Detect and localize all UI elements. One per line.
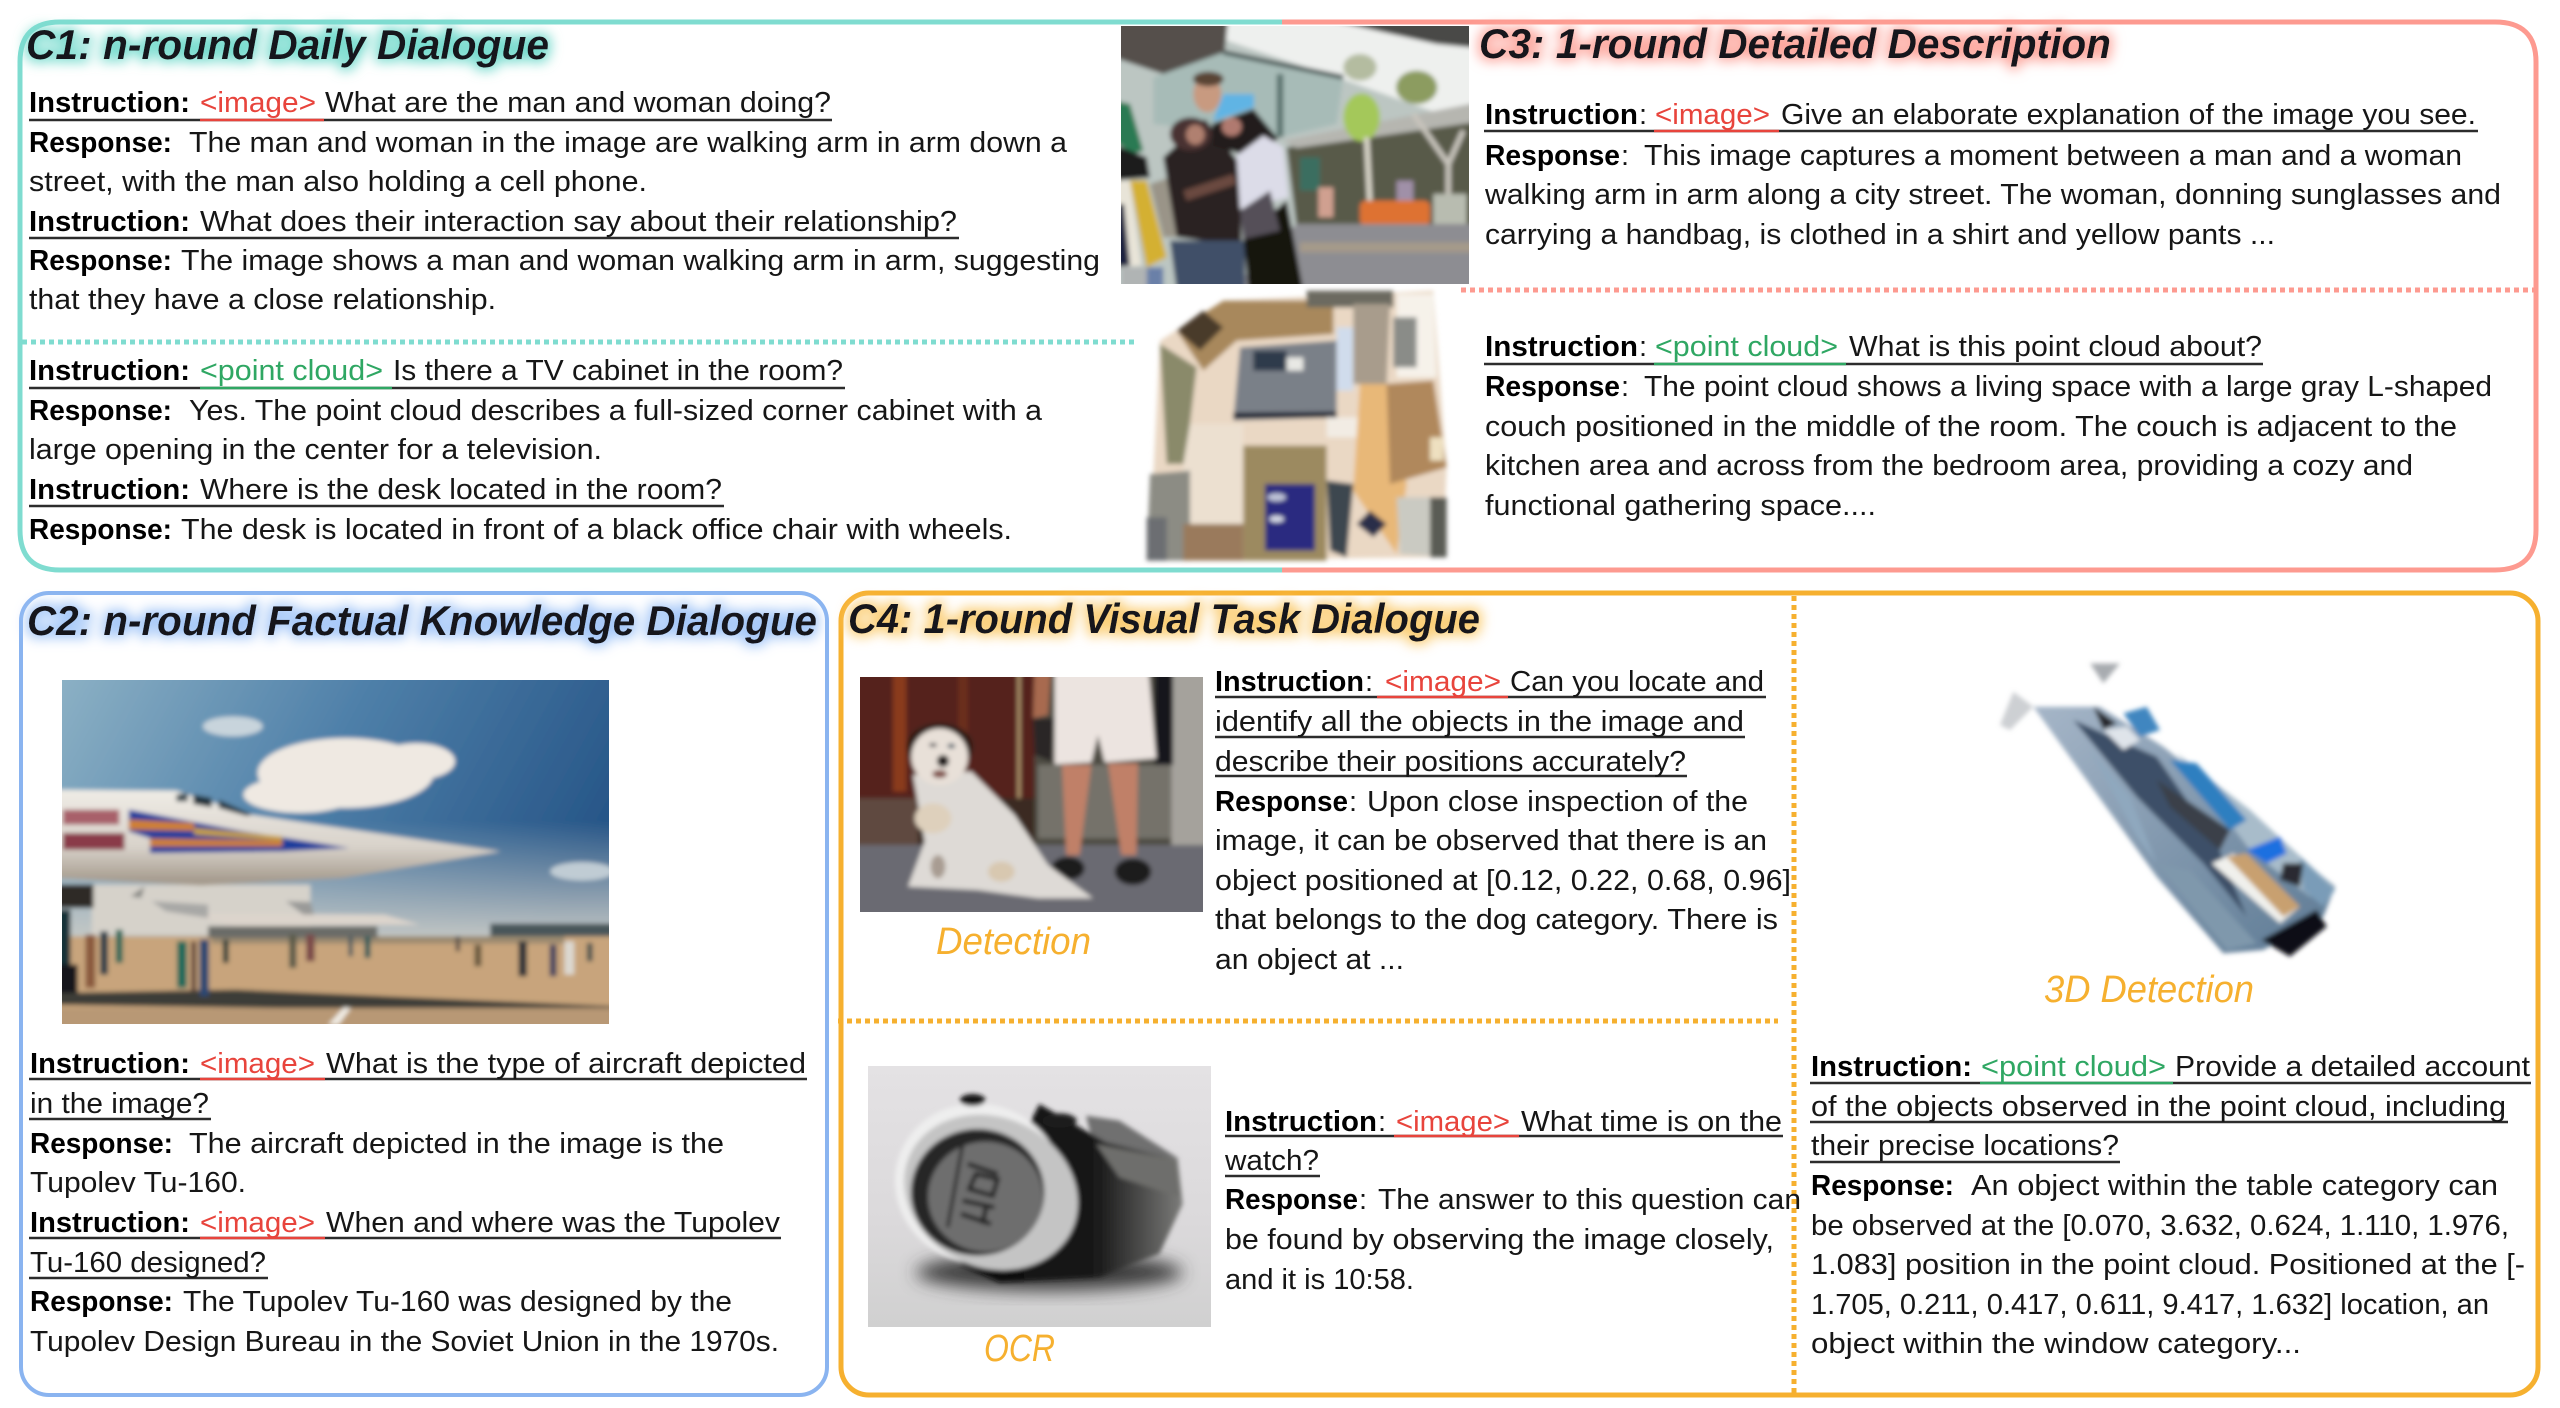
text block: OCR instruction and response: : <box>1378 1106 1386 1138</box>
text block: OCR instruction and response: watch? <box>1224 1145 1319 1177</box>
text block: C2 first question and answer <box>29 1048 807 1199</box>
text block: C3 image description: walking arm in arm along a city street. The woman, donning sunglasses and <box>1484 179 2501 211</box>
text block: C1 image dialogue: that they have a close relationship. <box>29 284 496 316</box>
text block: 3D detection instruction and response: Provide a detailed account <box>2175 1051 2530 1083</box>
text block: C3 image description <box>1484 99 2501 251</box>
text block: C3 point cloud description: What is this point cloud about? <box>1849 331 2262 363</box>
text block: C3 image description: Instruction <box>1485 99 1638 131</box>
text block: C3 image description: <image> <box>1655 99 1770 131</box>
text block: C1 point cloud dialogue: Where is the desk located in the room? <box>200 474 722 506</box>
text block: C1 image dialogue: <image> <box>200 87 316 119</box>
text block: detection instruction and response: that belongs to the dog category. There is <box>1215 904 1778 936</box>
text block: C1 image dialogue: Response: <box>29 245 172 277</box>
heading: C2: C2: n-round Factual Knowledge Dialogue <box>27 597 817 644</box>
text block: OCR instruction and response: be found by observing the image closely, <box>1225 1224 1774 1256</box>
text block: C1 point cloud dialogue: large opening in the center for a television. <box>29 434 602 466</box>
text block: C2 first question and answer: Instruction: <box>30 1048 190 1080</box>
text block: detection instruction and response: describe their positions accurately? <box>1215 746 1686 778</box>
panel: C1 n-round daily dialogue <box>20 21 1282 570</box>
text block: C1 point cloud dialogue: Instruction: <box>29 474 190 506</box>
text block: 3D detection instruction and response: <point cloud> <box>1981 1051 2166 1083</box>
text block: C2 second question and answer: Response: <box>30 1286 173 1318</box>
photo: white dog beside person in shorts <box>860 677 1203 912</box>
text block: detection instruction and response: an object at ... <box>1215 944 1404 976</box>
text block: detection instruction and response: object positioned at [0.12, 0.22, 0.68, 0.96] <box>1215 865 1791 897</box>
heading: C4: C4: 1-round Visual Task Dialogue <box>848 595 1480 642</box>
text block: C3 point cloud description: <point cloud> <box>1655 331 1838 363</box>
text block: C1 image dialogue: The image shows a man and woman walking arm in arm, suggesting <box>181 245 1100 277</box>
text block: OCR instruction and response: Instruction <box>1225 1106 1377 1138</box>
text block: C3 point cloud description: The point cloud shows a living space with a large gray L-shaped <box>1644 371 2492 403</box>
text block: detection instruction and response <box>1215 666 1791 976</box>
text block: C2 first question and answer: <image> <box>200 1048 315 1080</box>
text block: C3 point cloud description: Response <box>1485 371 1620 403</box>
text block: detection instruction and response: Can you locate and <box>1510 666 1764 698</box>
text block: C1 image dialogue <box>29 87 1100 316</box>
text block: C3 image description: carrying a handbag, is clothed in a shirt and yellow pants ... <box>1485 219 2275 251</box>
caption: OCR: OCR <box>984 1328 1055 1370</box>
text block: C1 image dialogue: street, with the man also holding a cell phone. <box>29 166 647 198</box>
text block: detection instruction and response: image, it can be observed that there is an <box>1215 825 1767 857</box>
photo: digital sports watch <box>866 1064 1213 1327</box>
text block: OCR instruction and response: <image> <box>1396 1106 1510 1138</box>
text block: C2 first question and answer: in the image? <box>30 1088 209 1120</box>
text block: C3 image description: : <box>1621 140 1629 172</box>
text block: detection instruction and response: Upon close inspection of the <box>1367 786 1748 818</box>
text block: detection instruction and response: Response <box>1215 786 1348 818</box>
panel border: C1 <box>20 22 1282 570</box>
caption: Detection: Detection <box>936 921 1091 963</box>
text block: 3D detection instruction and response: 1.083] position in the point cloud. Positioned at the [- <box>1811 1249 2525 1281</box>
text block: 3D detection instruction and response: Instruction: <box>1811 1051 1972 1083</box>
text block: OCR instruction and response <box>1224 1106 1801 1296</box>
text block: C3 image description: This image captures a moment between a man and a woman <box>1644 140 2462 172</box>
text block: C1 point cloud dialogue: Yes. The point cloud describes a full-sized corner cabinet with a <box>189 395 1043 427</box>
text block: C2 second question and answer: When and where was the Tupolev <box>326 1207 781 1239</box>
heading: C3: C3: 1-round Detailed Description <box>1479 20 2111 67</box>
text block: OCR instruction and response: Response <box>1225 1184 1358 1216</box>
text block: C3 point cloud description: functional gathering space.... <box>1485 490 1876 522</box>
text block: 3D detection instruction and response: 1.705, 0.211, 0.417, 0.611, 9.417, 1.632] location, an <box>1811 1289 2489 1321</box>
text block: detection instruction and response: Instruction <box>1215 666 1364 698</box>
text block: C1 point cloud dialogue: Response: <box>29 514 172 546</box>
text block: C1 image dialogue: Response: <box>29 127 172 159</box>
text block: C1 image dialogue: What are the man and woman doing? <box>325 87 831 119</box>
text block: C2 first question and answer: What is the type of aircraft depicted <box>326 1048 806 1080</box>
text block: 3D detection instruction and response: object within the window category... <box>1811 1328 2301 1360</box>
text block: C2 second question and answer: Instruction: <box>30 1207 190 1239</box>
text block: C3 image description: Response <box>1485 140 1620 172</box>
text block: C2 second question and answer: Tu-160 designed? <box>30 1247 266 1279</box>
text block: C2 second question and answer: <image> <box>200 1207 315 1239</box>
panel: C3 1-round detailed description <box>1282 20 2536 570</box>
text block: C3 point cloud description: couch positioned in the middle of the room. The couch is adjacent to the <box>1485 411 2457 443</box>
text block: C3 image description: Give an elaborate explanation of the image you see. <box>1781 99 2476 131</box>
panel: C4 1-round visual task dialogue <box>838 593 2538 1395</box>
panel border: C3 <box>1282 22 2536 570</box>
text block: detection instruction and response: : <box>1365 666 1373 698</box>
text block: C1 image dialogue: The man and woman in the image are walking arm in arm down a <box>189 127 1068 159</box>
text block: 3D detection instruction and response: their precise locations? <box>1811 1130 2119 1162</box>
text block: 3D detection instruction and response: be observed at the [0.070, 3.632, 0.624, 1.110, 1.976, <box>1811 1210 2509 1242</box>
text block: C1 image dialogue: Instruction: <box>29 206 190 238</box>
text block: C2 first question and answer: Response: <box>30 1128 173 1160</box>
text block: C1 point cloud dialogue: The desk is located in front of a black office chair with wheels. <box>181 514 1012 546</box>
photo: man and woman walking arm in arm <box>1121 26 1469 284</box>
text block: detection instruction and response: : <box>1349 786 1357 818</box>
text block: 3D detection instruction and response <box>1810 1051 2531 1360</box>
text block: C1 point cloud dialogue: <point cloud> <box>200 355 383 387</box>
text block: C2 second question and answer <box>29 1207 781 1358</box>
text block: OCR instruction and response: The answer to this question can <box>1378 1184 1801 1216</box>
text block: 3D detection instruction and response: of the objects observed in the point cloud, including <box>1811 1091 2506 1123</box>
text block: 3D detection instruction and response: An object within the table category can <box>1971 1170 2498 1202</box>
text block: C2 first question and answer: Tupolev Tu-160. <box>30 1167 246 1199</box>
text block: C3 point cloud description: : <box>1639 331 1647 363</box>
text block: C1 point cloud dialogue <box>29 355 1043 546</box>
image: 3D point cloud scene for detection <box>2000 663 2335 957</box>
text block: OCR instruction and response: What time is on the <box>1521 1106 1782 1138</box>
text block: OCR instruction and response: : <box>1359 1184 1367 1216</box>
text block: C2 second question and answer: The Tupolev Tu-160 was designed by the <box>183 1286 732 1318</box>
text block: OCR instruction and response: and it is 10:58. <box>1225 1264 1414 1296</box>
text block: C2 first question and answer: The aircraft depicted in the image is the <box>189 1128 724 1160</box>
text block: 3D detection instruction and response: Response: <box>1811 1170 1954 1202</box>
text block: C2 second question and answer: Tupolev Design Bureau in the Soviet Union in the 1970s. <box>30 1326 779 1358</box>
text block: C1 image dialogue: Instruction: <box>29 87 190 119</box>
caption: 3D Detection: 3D Detection <box>2044 969 2254 1011</box>
text block: C3 point cloud description: Instruction <box>1485 331 1638 363</box>
panel border: C4 <box>841 593 2538 1395</box>
text block: C3 image description: : <box>1639 99 1647 131</box>
text block: C1 point cloud dialogue: Instruction: <box>29 355 190 387</box>
text block: C3 point cloud description <box>1484 331 2492 522</box>
heading: C1: C1: n-round Daily Dialogue <box>26 21 549 68</box>
text block: C1 point cloud dialogue: Response: <box>29 395 172 427</box>
text block: C1 point cloud dialogue: Is there a TV cabinet in the room? <box>393 355 843 387</box>
photo: colored point cloud of a room, top view <box>1147 291 1447 561</box>
panel border: C2 <box>21 593 827 1395</box>
text block: C3 point cloud description: kitchen area and across from the bedroom area, providing a cozy and <box>1485 450 2413 482</box>
text block: C3 point cloud description: : <box>1621 371 1629 403</box>
text block: C1 image dialogue: What does their interaction say about their relationship? <box>200 206 957 238</box>
panel: C2 n-round factual knowledge dialogue <box>21 593 827 1395</box>
photo: Tupolev Tu-160 aircraft at an air show <box>62 680 609 1024</box>
text block: detection instruction and response: identify all the objects in the image and <box>1215 706 1744 738</box>
text block: detection instruction and response: <image> <box>1385 666 1501 698</box>
